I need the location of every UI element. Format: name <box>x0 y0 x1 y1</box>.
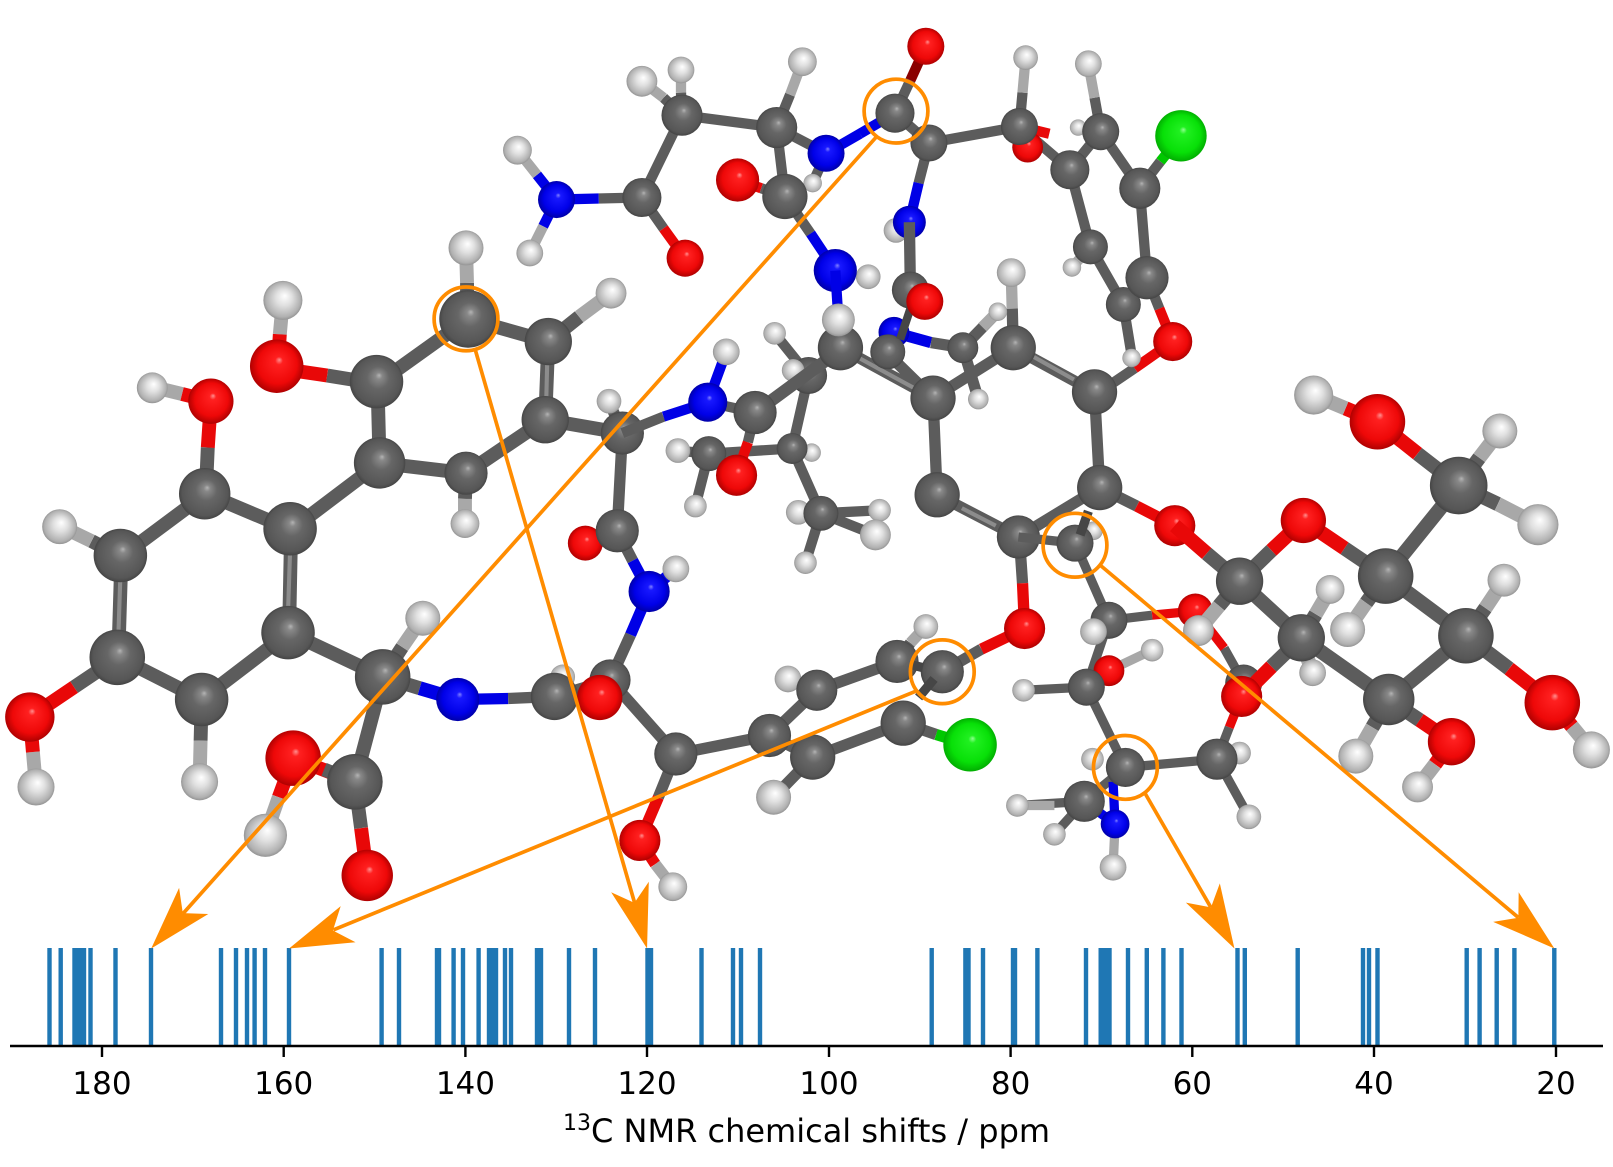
arrow: to 159 ppm peak <box>289 691 916 948</box>
x axis tick labels: 20 <box>1536 1066 1576 1102</box>
ring: carbon at 20 ppm <box>1043 513 1107 577</box>
molecule: ball-and-stick model <box>5 28 1610 901</box>
x axis tick labels: 140 <box>436 1066 495 1102</box>
x axis line and ticks <box>10 1046 1603 1057</box>
arrow: to 55 ppm peak <box>1145 793 1234 948</box>
fragment: top right chlorinated ring <box>1001 45 1207 394</box>
annotation arrows and atom highlight rings <box>151 79 1554 948</box>
x axis tick labels: 80 <box>991 1066 1030 1102</box>
fragment: carboxylic acid group <box>244 649 410 901</box>
x axis tick labels: 100 <box>799 1066 859 1102</box>
x axis tick labels: 160 <box>254 1066 313 1102</box>
fragment: lower right amino sugar <box>1006 511 1262 881</box>
ring: carbon at 159 ppm <box>910 640 974 704</box>
fragment: central aromatic ring <box>818 222 1195 559</box>
fragment: left biphenyl rings <box>5 230 626 805</box>
arrow: to 174 ppm peak <box>151 137 876 948</box>
arrow: to 120 ppm peak <box>475 350 649 948</box>
x axis title: 13 <box>563 1111 591 1136</box>
x axis tick labels: 180 <box>72 1066 132 1102</box>
x axis tick labels <box>72 1066 1576 1102</box>
NMR spectrum sticks <box>50 948 1554 1046</box>
x axis title: C NMR chemical shifts / ppm <box>591 1112 1050 1150</box>
ring: carbon at 120 ppm <box>434 287 498 351</box>
ring: carbon at 174 ppm <box>864 79 928 143</box>
x axis tick labels: 120 <box>617 1066 677 1102</box>
ring: carbon at 55 ppm <box>1094 736 1157 799</box>
x axis tick labels: 60 <box>1173 1066 1212 1102</box>
arrow: to 20 ppm peak <box>1100 565 1554 948</box>
fragment: lower peptide and chlorinated ring <box>436 389 1045 901</box>
fragment: top amide chain <box>503 28 1019 292</box>
fragment: right glucose ring <box>1175 375 1610 802</box>
fragment: central aliphatic chain and amide <box>622 271 891 574</box>
x axis tick labels: 40 <box>1354 1066 1394 1102</box>
